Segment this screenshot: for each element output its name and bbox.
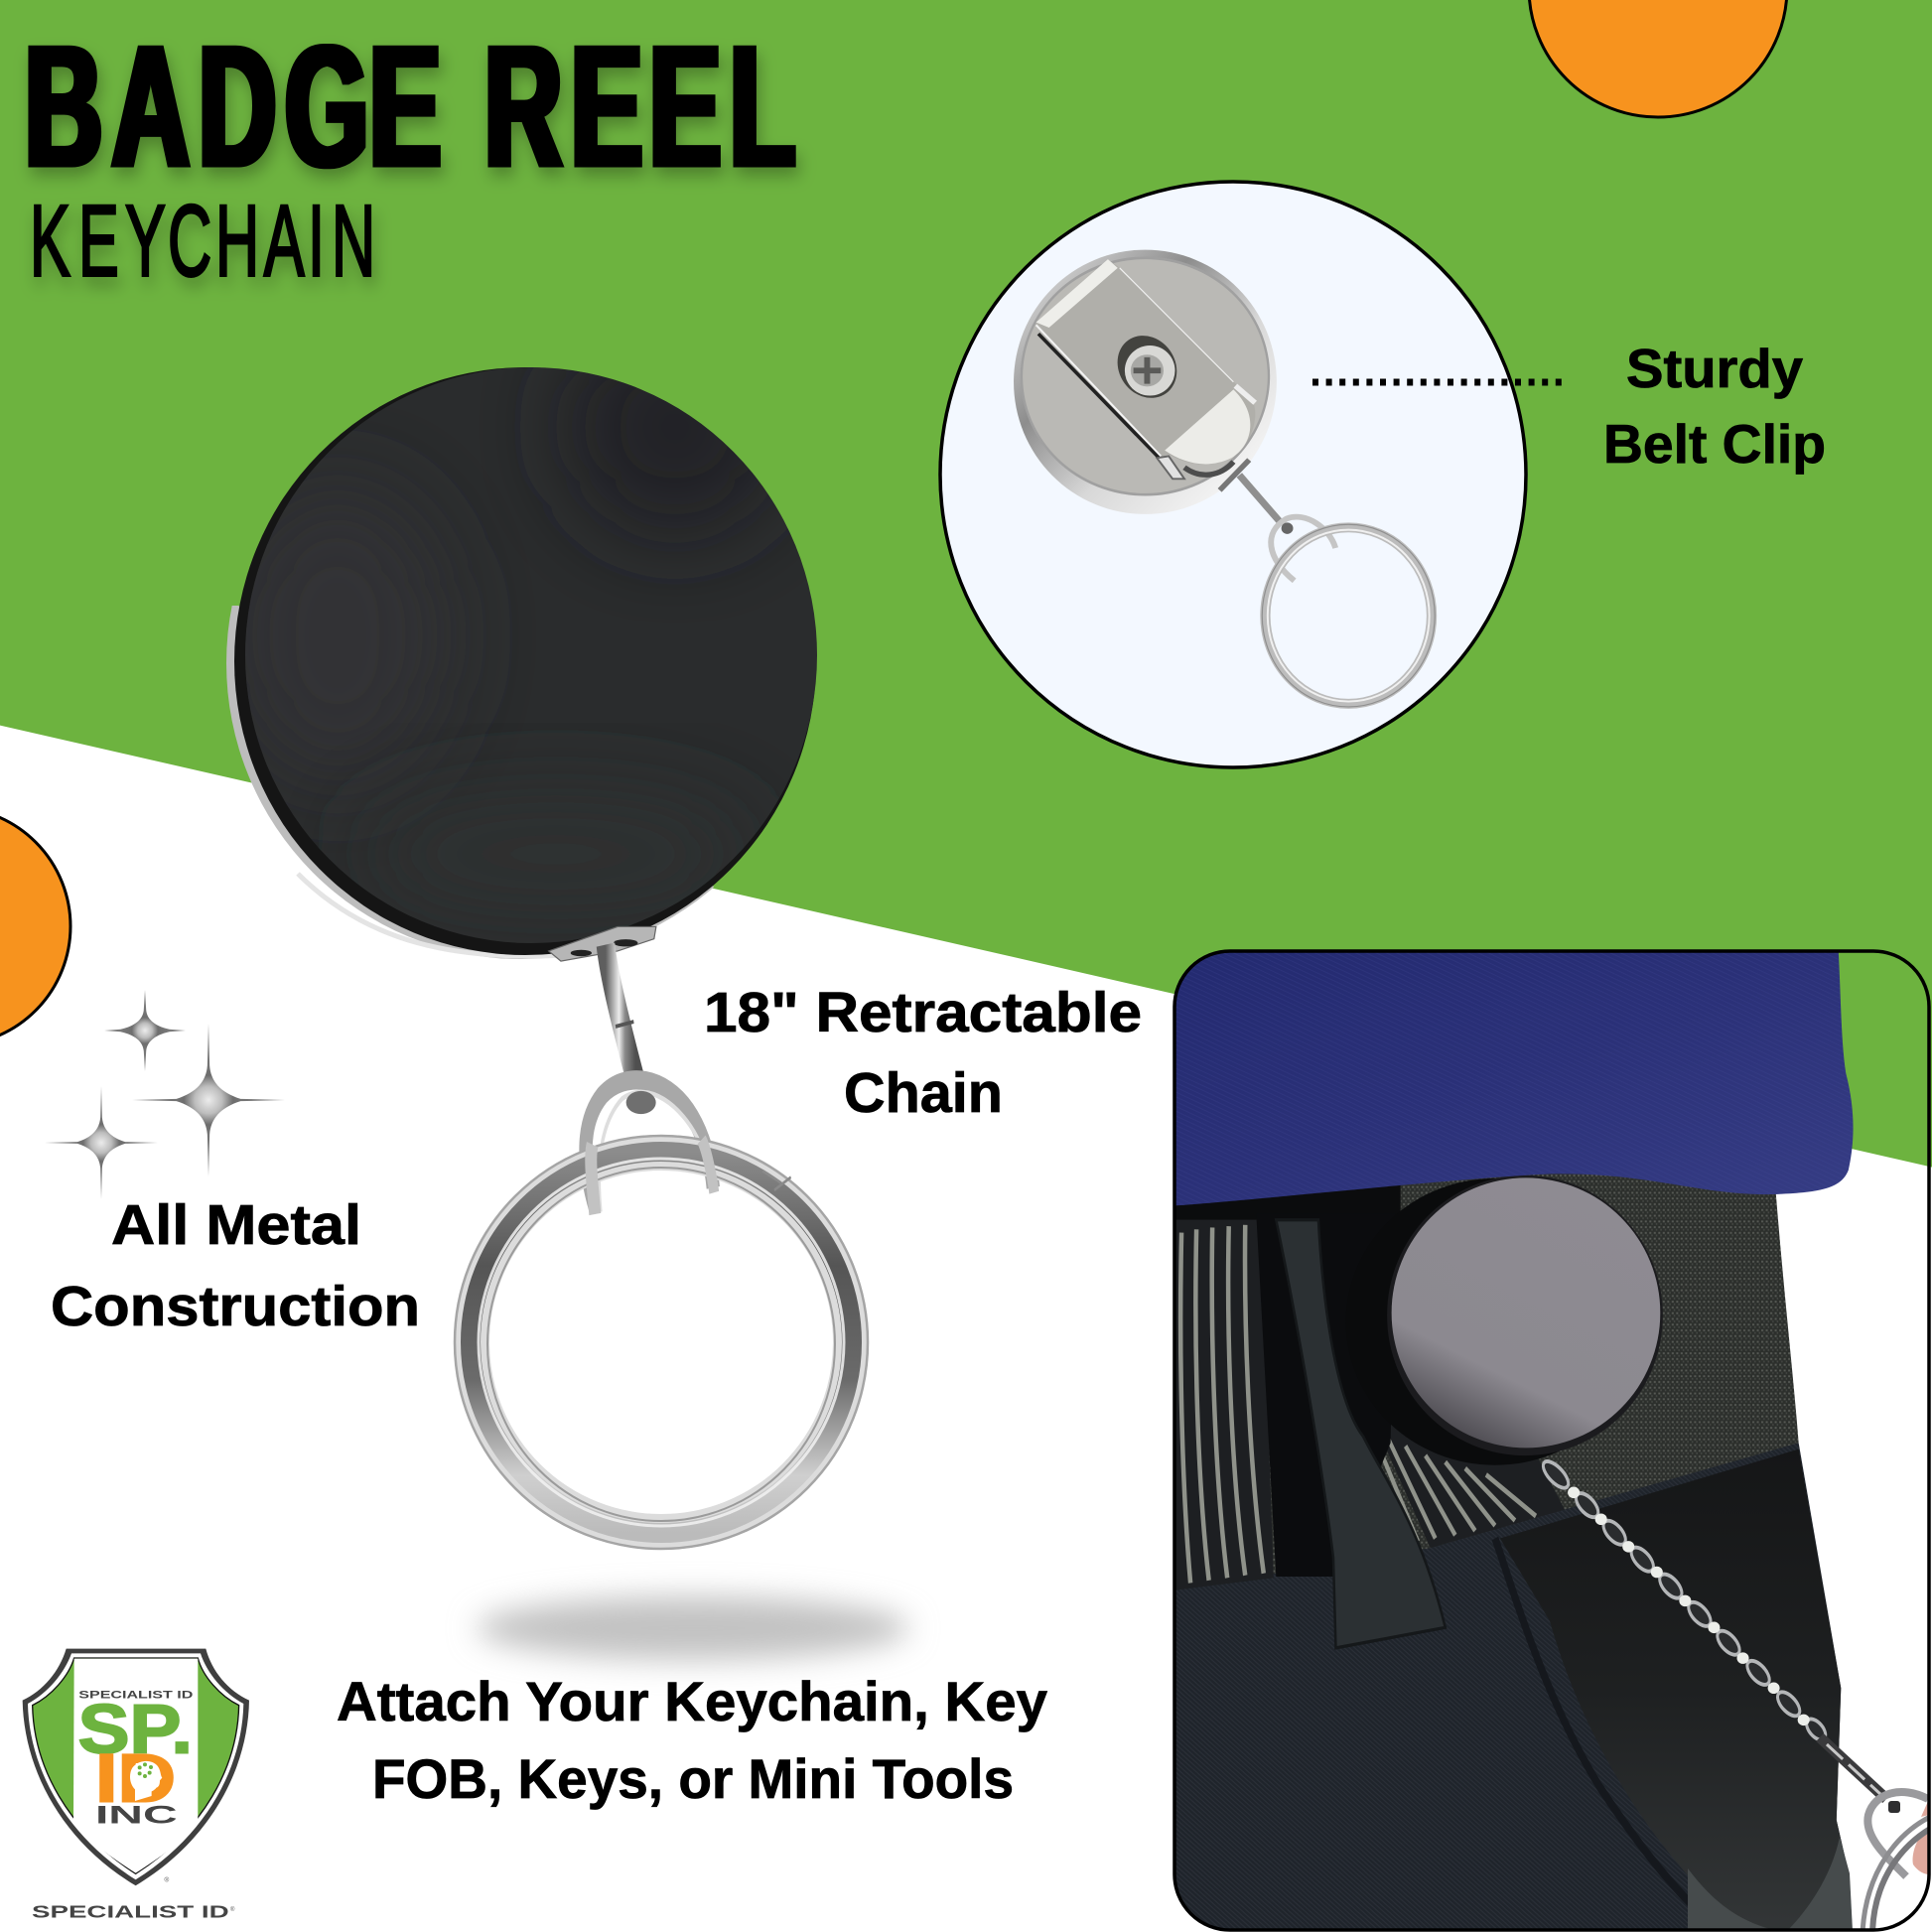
chain bbox=[1540, 1456, 1829, 1744]
product: main black badge reel bbox=[226, 318, 817, 961]
callout: retractable chain bbox=[704, 981, 1142, 1125]
callout: all metal construction: Construction bbox=[51, 1275, 420, 1338]
callout: attachment uses: FOB, Keys, or Mini Tools bbox=[372, 1747, 1014, 1810]
callout: all metal construction: All Metal bbox=[111, 1193, 361, 1257]
decorative orange circle left bbox=[0, 807, 70, 1045]
belt loop bbox=[1256, 1213, 1446, 1648]
logo: specialist id shield: ® bbox=[164, 1876, 169, 1884]
logo: specialist id shield bbox=[23, 1649, 249, 1921]
logo: specialist id shield: SP. bbox=[78, 1690, 193, 1767]
reel on belt bbox=[1387, 1175, 1663, 1465]
callout: sturdy belt clip: Belt Clip bbox=[1603, 413, 1826, 475]
logo: specialist id shield: ID bbox=[95, 1740, 176, 1817]
panel: belt clip circle bbox=[940, 182, 1526, 767]
pocket lip bbox=[1688, 1837, 1853, 1931]
callout: attachment uses bbox=[337, 1670, 1047, 1810]
title: KEYCHAIN bbox=[30, 184, 375, 297]
callout: retractable chain: Chain bbox=[844, 1061, 1003, 1125]
callout leader line bbox=[1312, 379, 1563, 385]
logo: specialist id shield: SPECIALIST ID bbox=[32, 1901, 229, 1921]
belt bbox=[1172, 1169, 1799, 1590]
icon: metal sparkles bbox=[45, 990, 285, 1199]
product: swivel, bail and split ring bbox=[455, 945, 868, 1549]
logo: specialist id shield: SPECIALIST ID bbox=[78, 1690, 193, 1702]
floor shadow under ring bbox=[477, 1596, 909, 1660]
jeans bbox=[1172, 1443, 1853, 1932]
callout: retractable chain: 18" Retractable bbox=[704, 981, 1142, 1044]
callout: attachment uses: Attach Your Keychain, Key bbox=[337, 1670, 1047, 1732]
callout: all metal construction bbox=[51, 1193, 420, 1338]
decorative orange circle top right bbox=[1529, 0, 1787, 117]
hook and split ring bbox=[1820, 1737, 1930, 1932]
logo: specialist id shield: ® bbox=[230, 1906, 235, 1913]
title: BADGE REEL bbox=[25, 10, 795, 203]
callout: sturdy belt clip bbox=[1603, 338, 1826, 475]
panel: lifestyle photo of reel on belt bbox=[1172, 951, 1930, 1932]
shirt bbox=[1172, 951, 1854, 1206]
callout: sturdy belt clip: Sturdy bbox=[1626, 338, 1803, 399]
icon: chrome reel back with belt clip bbox=[1014, 250, 1435, 707]
logo: specialist id shield: INC bbox=[95, 1802, 178, 1829]
title bbox=[25, 10, 795, 297]
reel bracket bbox=[549, 926, 656, 961]
